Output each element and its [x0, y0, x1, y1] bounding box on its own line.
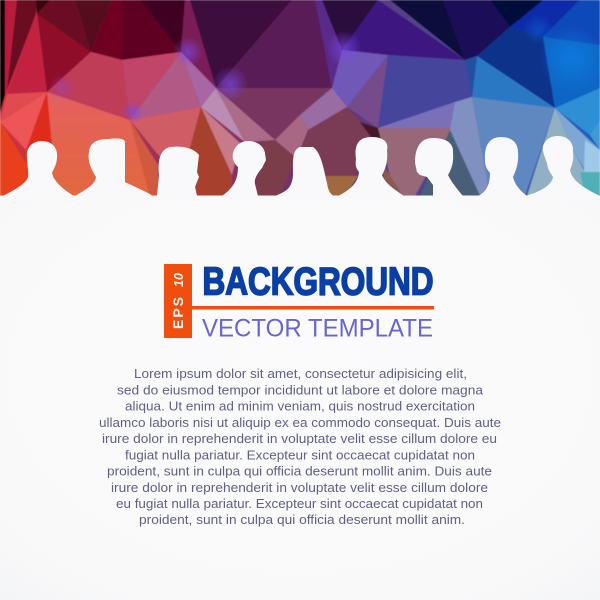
body text: proident, sunt in culpa qui officia deserunt mollit anim. Duis aute: [107, 464, 492, 479]
person 6: [338, 137, 404, 196]
orange rule: [192, 306, 434, 310]
person 5: [275, 147, 334, 196]
person 1: [3, 141, 74, 196]
heading: BACKGROUND: [202, 260, 434, 303]
body text: [99, 366, 501, 527]
body text: proident, sunt in culpa qui officia deserunt mollit anim.: [139, 512, 465, 527]
body text: fugiat nulla pariatur. Excepteur sint occaecat cupidatat non: [125, 448, 475, 462]
person 4: [222, 141, 266, 196]
body text: Lorem ipsum dolor sit amet, consectetur adipisicing elit,: [134, 366, 467, 381]
body text: irure dolor in reprehenderit in voluptate velit esse cillum dolore eu: [102, 431, 497, 446]
person 9: [525, 136, 600, 196]
person 2: [75, 138, 153, 196]
subheading: VECTOR TEMPLATE: [202, 314, 433, 342]
person 3: [157, 147, 199, 196]
person 7: [415, 138, 463, 196]
silhouettes of people: [0, 136, 600, 198]
title block: [164, 260, 434, 342]
body text: sed do eiusmod tempor incididunt ut labore et dolore magna: [117, 382, 484, 398]
polygon banner: [0, 0, 600, 197]
page background: [0, 190, 600, 600]
body text: irure dolor in reprehenderit in voluptate velit esse cillum dolore: [111, 480, 488, 495]
body text: aliqua. Ut enim ad minim veniam, quis nostrud exercitation: [125, 399, 475, 414]
orange EPS tab: EPS: [170, 297, 186, 329]
body text: ullamco laboris nisi ut aliquip ex ea commodo consequat. Duis aute: [99, 415, 501, 430]
person 8: [478, 137, 527, 196]
body text: eu fugiat nulla pariatur. Excepteur sint occaecat cupidatat non: [116, 496, 483, 511]
orange EPS tab: [164, 264, 192, 338]
orange EPS tab: 10: [171, 272, 186, 287]
